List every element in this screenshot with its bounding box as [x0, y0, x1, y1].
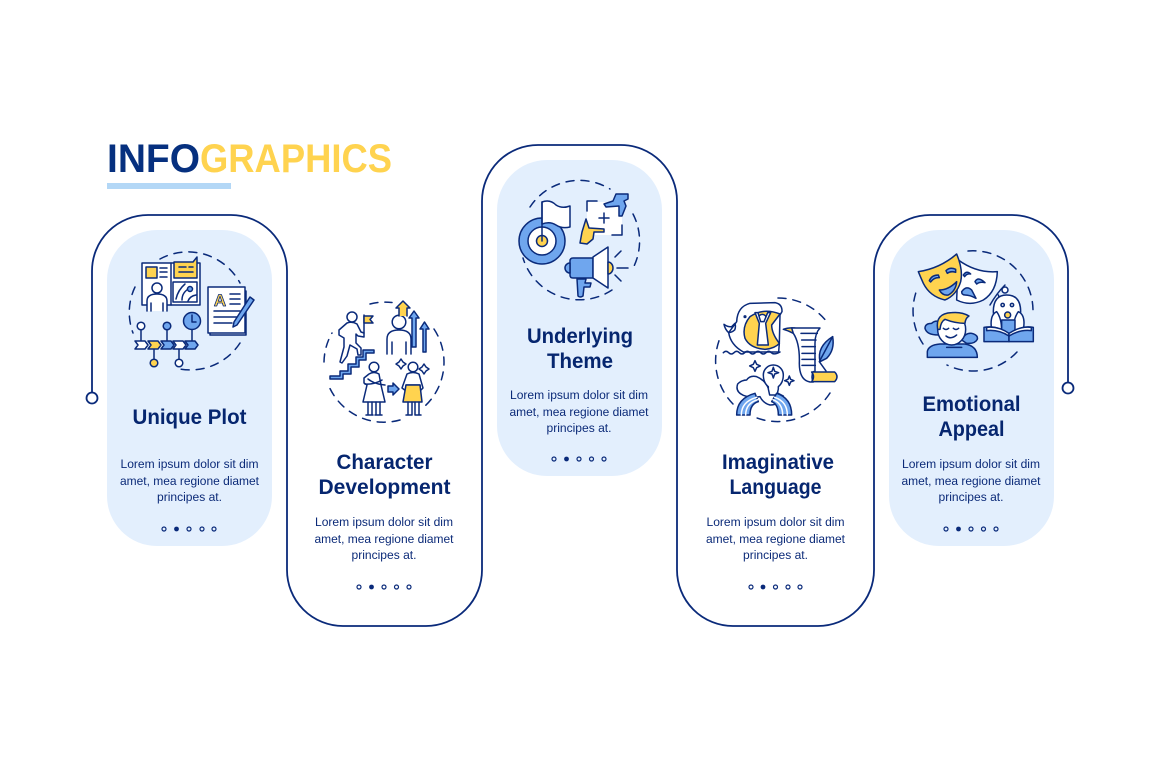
text block: principes at. [352, 548, 416, 562]
icon: character growth [324, 301, 444, 422]
text block: Lorem ipsum dolor sit dim [510, 388, 648, 402]
panel: character development [314, 301, 454, 589]
title [107, 137, 392, 189]
pagination dots [944, 527, 998, 531]
text block: Lorem ipsum dolor sit dim [120, 457, 258, 471]
icon: story timeline and notes [129, 252, 254, 370]
text block: principes at. [938, 490, 1004, 504]
text block [510, 388, 649, 435]
text block: principes at. [546, 421, 612, 435]
panel: underlying theme [497, 160, 662, 476]
text block: principes at. [157, 490, 222, 504]
title: INFO [107, 137, 200, 181]
text block: amet, mea regione diamet [120, 474, 260, 488]
heading: Unique Plot [132, 406, 246, 429]
text block [706, 515, 846, 562]
text block: Lorem ipsum dolor sit dim [902, 457, 1040, 471]
text block [314, 515, 454, 562]
heading: Language [730, 476, 822, 499]
title: GRAPHICS [200, 137, 392, 181]
text block [120, 457, 260, 504]
icon: story timeline and notes: A [214, 291, 226, 310]
panel: imaginative language [706, 298, 846, 589]
heading: Imaginative [722, 451, 834, 474]
icon: target, focus and megaphone [519, 180, 640, 300]
heading: Underlying [527, 325, 633, 348]
heading [922, 393, 1020, 441]
icon: theatre masks, boy and reader [913, 251, 1033, 371]
pagination dots [749, 585, 802, 589]
text block [902, 457, 1041, 504]
heading: Development [318, 476, 450, 499]
icon: whale, scroll and rainbow [716, 298, 837, 422]
heading: Theme [547, 350, 613, 373]
text block: Lorem ipsum dolor sit dim [706, 515, 844, 529]
panel: emotional appeal [889, 230, 1054, 546]
pagination dots [357, 585, 411, 589]
connecting outline [86, 145, 1074, 626]
text block: amet, mea regione diamet [706, 532, 846, 546]
heading: Character [336, 451, 432, 474]
panel: unique plot [107, 230, 272, 546]
pagination dots [162, 527, 216, 531]
heading [722, 451, 834, 499]
heading [527, 325, 633, 373]
text block: amet, mea regione diamet [510, 405, 649, 419]
heading: Emotional [922, 393, 1020, 416]
text block: principes at. [743, 548, 808, 562]
text block: amet, mea regione diamet [314, 532, 454, 546]
text block: amet, mea regione diamet [902, 474, 1041, 488]
heading: Appeal [938, 418, 1004, 441]
text block: Lorem ipsum dolor sit dim [315, 515, 453, 529]
heading [318, 451, 450, 499]
pagination dots [552, 457, 606, 461]
